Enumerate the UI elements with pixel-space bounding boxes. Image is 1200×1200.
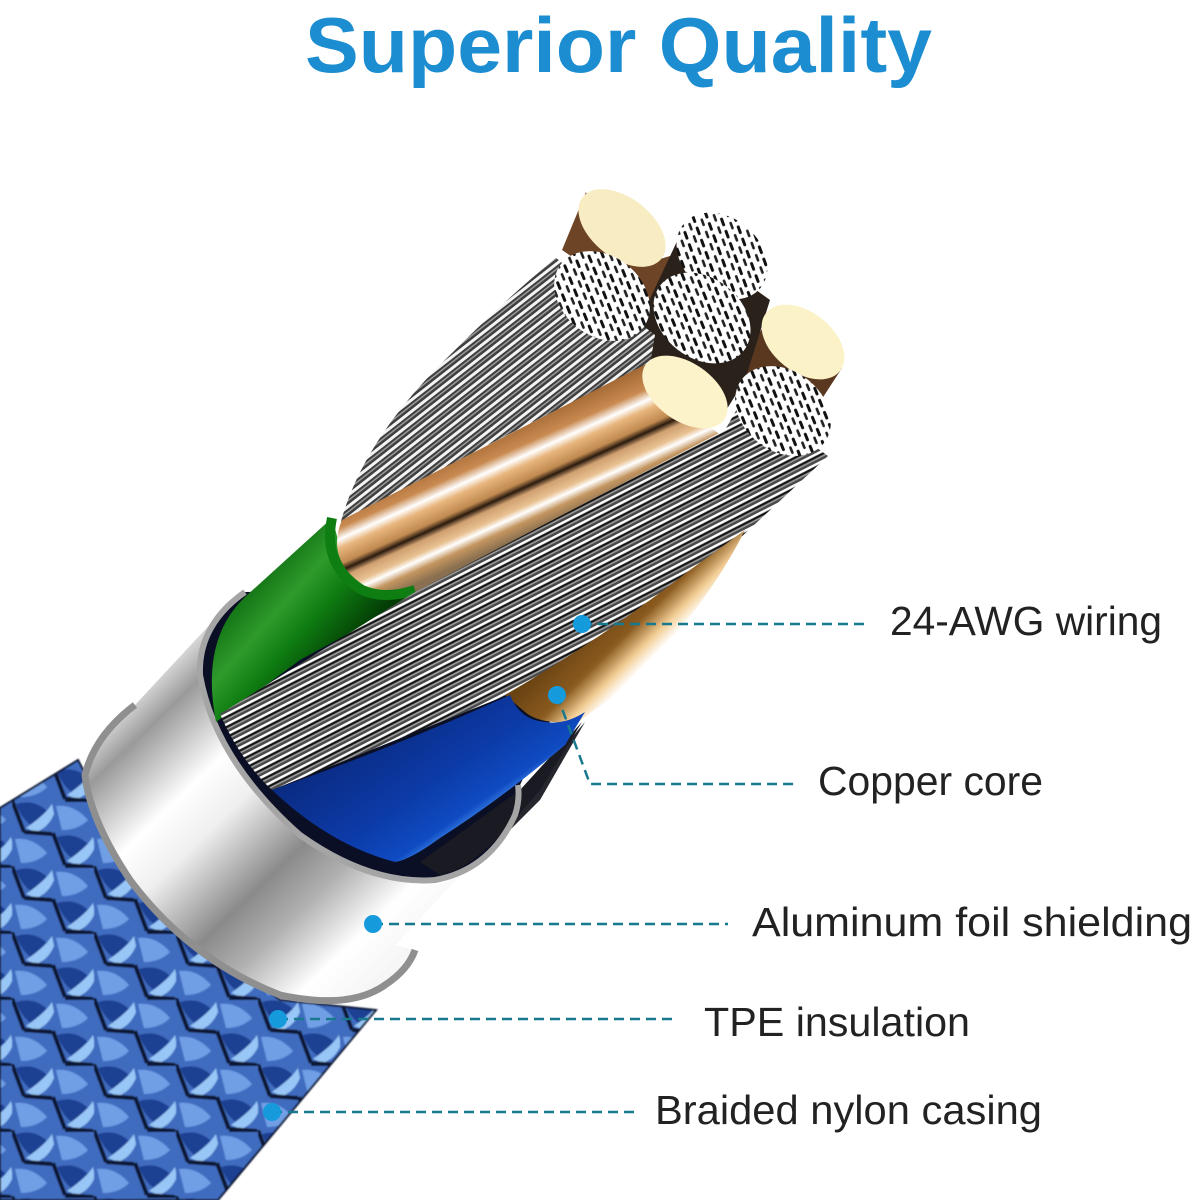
cable illustration [0, 174, 859, 1200]
callout: braided nylon casing [263, 1087, 1042, 1133]
callout: copper core: Copper core [818, 758, 1043, 804]
title: Superior Quality [305, 1, 932, 89]
lower back steel strand [400, 722, 585, 867]
front rim of the foil [200, 592, 519, 880]
callout: braided nylon casing: Braided nylon casing [655, 1087, 1042, 1133]
lower steel strands in opening [420, 722, 582, 875]
callout: 24-AWG wiring: 24-AWG wiring [890, 598, 1162, 644]
copper conductor in green sleeve [337, 362, 725, 600]
foil back rim [85, 705, 415, 1001]
callout: 24-AWG wiring [573, 598, 1162, 644]
copper core section [505, 530, 745, 723]
steel wire front [220, 395, 828, 790]
callout: aluminum foil shielding [364, 899, 1192, 945]
rear copper wires [562, 174, 859, 425]
green sleeve mouth [330, 518, 415, 595]
steel end caps [536, 232, 849, 475]
callout: aluminum foil shielding: Aluminum foil shielding [752, 899, 1192, 945]
callout: TPE insulation: TPE insulation [704, 999, 970, 1045]
upper steel wire [340, 258, 655, 525]
callout: copper core [548, 686, 1043, 804]
braided nylon casing [0, 760, 376, 1200]
copper wire end [629, 341, 741, 443]
blue insulation [272, 695, 585, 862]
rear steel strand [659, 195, 785, 317]
green insulation [212, 518, 425, 722]
foil front opening [200, 590, 560, 880]
metal foil cylinder [85, 590, 518, 1001]
callout: TPE insulation [269, 999, 970, 1045]
